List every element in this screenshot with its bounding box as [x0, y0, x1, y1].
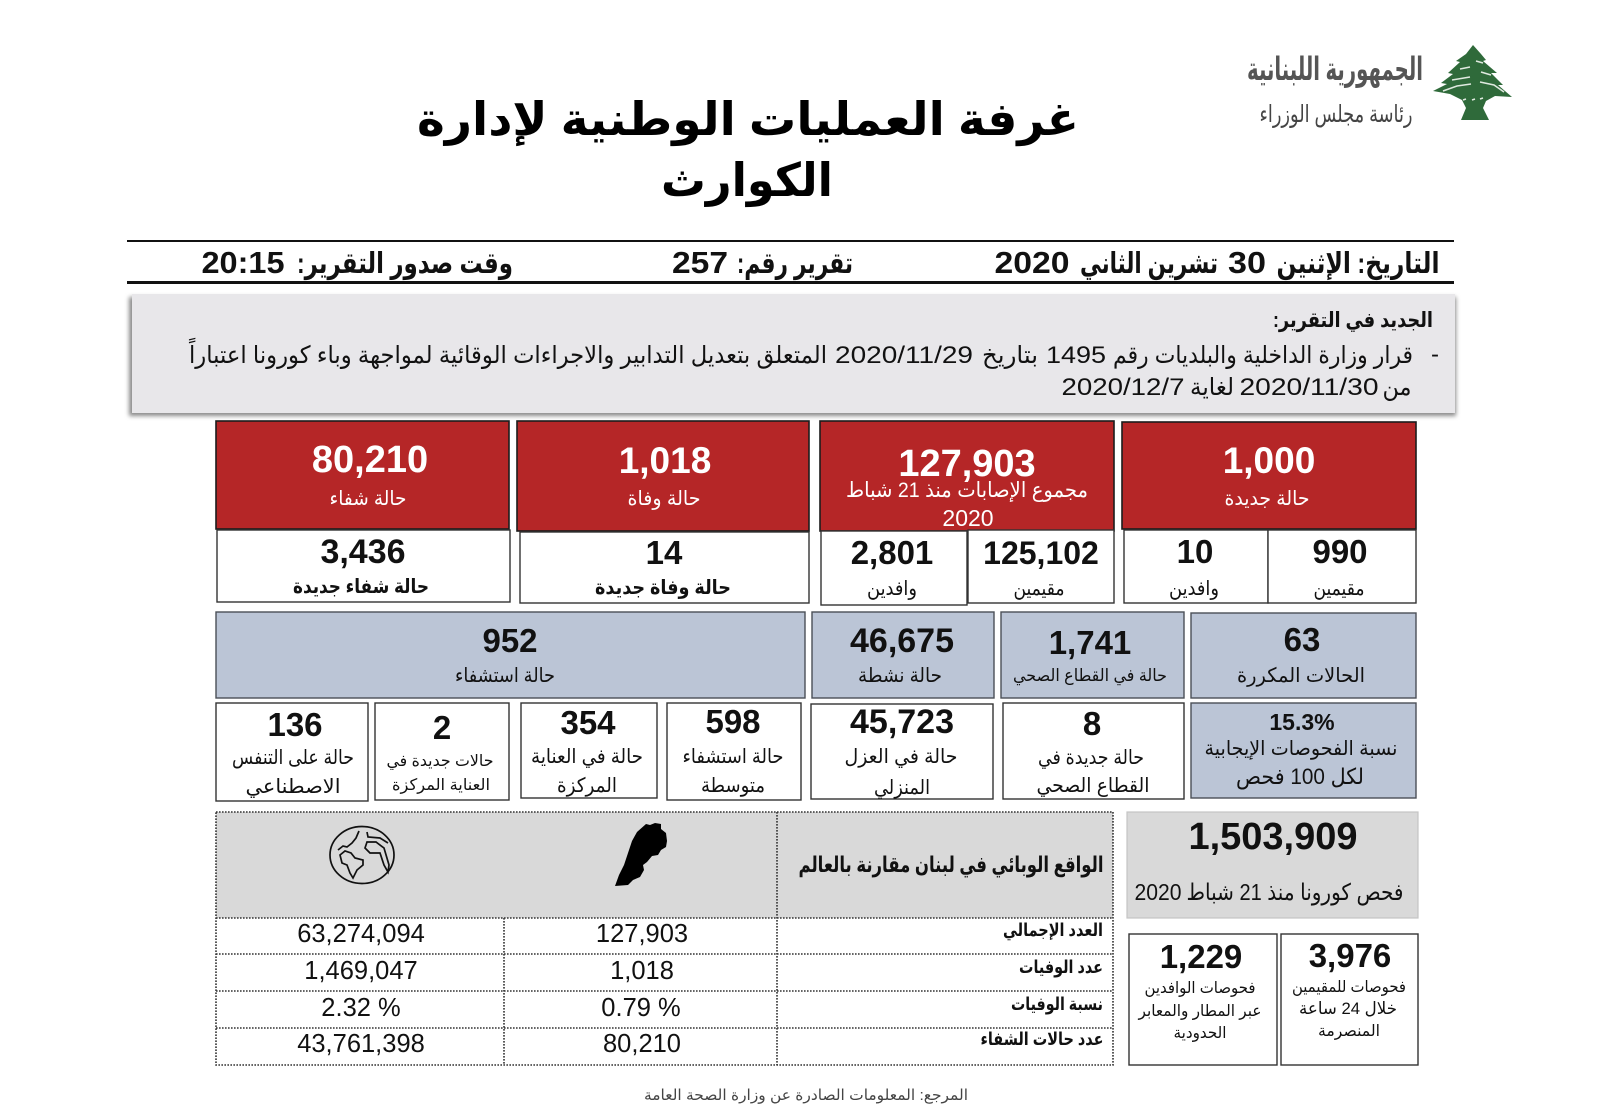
report time: 20:15 — [202, 245, 284, 280]
logo text: republic: الجمهورية اللبنانية — [1247, 51, 1423, 88]
row: total: 63,274,094 — [297, 920, 425, 948]
label: حالة شفاء — [330, 488, 406, 510]
row: deaths: 1,018 — [610, 957, 674, 985]
value: 1,229 — [1160, 938, 1242, 975]
row: total: العدد الإجمالي — [1003, 920, 1103, 941]
label line 2: القطاع الصحي — [1036, 775, 1150, 798]
card: total cases arrivals — [821, 531, 967, 605]
report date: 30 — [1228, 245, 1266, 280]
row: recoveries: 43,761,398 — [297, 1030, 425, 1058]
label line 2: عبر المطار والمعابر — [1138, 1003, 1262, 1021]
card: new recoveries — [217, 530, 510, 602]
report number: تقرير رقم: — [737, 248, 853, 280]
panel body line 1: بتاريخ — [982, 342, 1038, 369]
value: 2,801 — [851, 534, 933, 571]
label line 1: حالة جديدة في — [1038, 747, 1144, 770]
value: 1,741 — [1049, 624, 1131, 661]
report info bar — [127, 240, 1454, 284]
label line 1: مجموع الإصابات منذ 21 شباط — [846, 479, 1088, 502]
panel body line 2: من — [1382, 374, 1412, 401]
label: مقيمين — [1314, 578, 1364, 600]
label: حالة وفاة — [628, 488, 700, 510]
report number — [672, 245, 853, 280]
label line 3: الحدودية — [1174, 1025, 1226, 1043]
label line 1: فحوصات الوافدين — [1144, 980, 1256, 998]
row: death rate — [321, 994, 1103, 1022]
report date: التاريخ: الإثنين — [1276, 248, 1440, 280]
label line 2: 2020 — [942, 505, 994, 531]
label line 1: حالة في العناية — [531, 746, 643, 769]
card: resident tests — [1281, 934, 1418, 1065]
card: new cases residents — [1268, 530, 1416, 603]
report time — [202, 245, 513, 280]
icon: Lebanon map — [615, 823, 667, 886]
icon: globe — [330, 826, 394, 884]
panel body line 1: 2020/11/29 — [835, 342, 973, 369]
label line 2: المنزلي — [874, 777, 930, 800]
value: 952 — [482, 622, 538, 659]
panel: what's new in the report — [129, 294, 1456, 416]
row: total: 127,903 — [596, 920, 688, 948]
value: 10 — [1177, 533, 1213, 570]
label: حالة وفاة جديدة — [595, 577, 731, 599]
panel body line 2 — [1062, 374, 1412, 401]
panel body line 1 — [188, 338, 1413, 369]
label: حالة جديدة — [1224, 488, 1310, 510]
title: الكوارث — [661, 154, 833, 207]
card: moderate hospitalisation — [667, 703, 801, 800]
value: 1,000 — [1223, 440, 1315, 481]
label line 2: العناية المركزة — [392, 777, 490, 795]
row: deaths — [304, 957, 1103, 985]
label line 1: حالة على التنفس — [232, 747, 354, 769]
row: deaths: عدد الوفيات — [1019, 957, 1103, 978]
value: 1,018 — [619, 440, 711, 481]
value: 15.3% — [1269, 709, 1335, 735]
label line 2: لكل 100 فحص — [1236, 764, 1364, 790]
report date: 2020 — [994, 245, 1070, 280]
row: recoveries: عدد حالات الشفاء — [980, 1029, 1104, 1049]
label: وافدين — [867, 578, 917, 600]
label: 2020 — [1134, 879, 1182, 905]
label: حالة استشفاء — [455, 665, 555, 687]
card: arrival tests — [1129, 934, 1277, 1065]
row: death rate: 2.32 % — [321, 994, 401, 1022]
table heading: الواقع الوبائي في لبنان مقارنة بالعالم — [798, 852, 1104, 878]
report number: 257 — [672, 245, 728, 280]
title: غرفة العمليات الوطنية لإدارة — [417, 93, 1079, 146]
panel body line 1: المتعلق بتعديل التدابير والاجراءات الوقائية لمواجهة وباء كورونا اعتباراً — [188, 338, 827, 369]
card: total cases — [820, 421, 1114, 531]
panel body line 2: 2020/12/7 — [1062, 374, 1184, 401]
row: death rate: 0.79 % — [601, 994, 681, 1022]
value: 46,675 — [850, 622, 954, 660]
value: 127,903 — [898, 443, 1036, 485]
value: 598 — [705, 703, 761, 740]
label: الحالات المكررة — [1237, 665, 1365, 687]
row: deaths: 1,469,047 — [304, 957, 418, 985]
card: home isolation — [811, 703, 993, 800]
label line 1: نسبة الفحوصات الإيجابية — [1204, 738, 1398, 760]
source note: المرجع: المعلومات الصادرة عن وزارة الصحة العامة — [644, 1087, 968, 1104]
label line 1: حالة في العزل — [844, 746, 958, 769]
card: health sector cases — [1001, 612, 1184, 698]
value: 3,436 — [320, 533, 406, 571]
label line 3: المنصرمة — [1318, 1023, 1380, 1041]
card: new cases arrivals — [1124, 530, 1268, 603]
value: 63 — [1284, 621, 1320, 658]
value: 3,976 — [1309, 937, 1391, 974]
label: فحص كورونا منذ 21 شباط — [1186, 879, 1404, 906]
row: recoveries — [297, 1029, 1104, 1058]
card: hospitalised — [216, 612, 805, 698]
card: new ICU — [375, 703, 509, 800]
value: 990 — [1312, 533, 1368, 570]
logo text: presidency: رئاسة مجلس الوزراء — [1260, 101, 1412, 128]
label: حالة في القطاع الصحي — [1013, 666, 1167, 686]
value: 136 — [267, 706, 323, 743]
card: new deaths — [520, 532, 809, 603]
panel body line 2: 2020/11/30 — [1240, 374, 1378, 401]
value: 8 — [1083, 705, 1101, 742]
label: حالة شفاء جديدة — [293, 576, 429, 598]
value: 80,210 — [312, 439, 428, 481]
report date — [994, 245, 1440, 280]
card: ventilated — [216, 703, 368, 801]
panel body line 1: 1495 — [1046, 342, 1106, 369]
label line 2: المركزة — [557, 775, 617, 797]
label line 2: الاصطناعي — [246, 776, 340, 799]
row: total — [297, 920, 1103, 948]
row: recoveries: 80,210 — [603, 1030, 681, 1058]
table: Lebanon compared to the world — [216, 812, 1113, 1065]
label line 1: حالات جديدة في — [386, 753, 494, 771]
bullet dash: - — [1431, 341, 1439, 368]
label: حالة نشطة — [858, 665, 942, 687]
value: 354 — [560, 704, 616, 741]
row: death rate: نسبة الوفيات — [1011, 994, 1103, 1015]
label line 1: فحوصات للمقيمين — [1292, 979, 1406, 997]
value: 125,102 — [983, 535, 1099, 571]
report time: وقت صدور التقرير: — [297, 248, 513, 280]
label line 2: خلال 24 ساعة — [1299, 999, 1397, 1018]
panel body line 1: قرار وزارة الداخلية والبلديات رقم — [1113, 342, 1413, 369]
card: duplicate cases — [1191, 613, 1416, 698]
card: positivity rate — [1191, 703, 1416, 798]
panel body line 2: لغاية — [1190, 374, 1234, 401]
value: 45,723 — [850, 703, 954, 741]
label: وافدين — [1169, 578, 1219, 600]
report date: تشرين الثاني — [1080, 248, 1218, 280]
card: total tests — [1127, 812, 1418, 918]
card: recoveries — [216, 421, 509, 529]
value: 1,503,909 — [1188, 816, 1358, 858]
panel heading: الجديد في التقرير: — [1273, 309, 1433, 332]
value: 2 — [433, 709, 451, 746]
card: total cases residents — [968, 530, 1114, 603]
card: new health sector — [1003, 703, 1184, 799]
card: deaths — [517, 421, 809, 531]
card: active cases — [812, 612, 994, 698]
logo: Lebanese Republic emblem — [1247, 45, 1512, 128]
card: ICU — [521, 703, 657, 798]
label line 1: حالة استشفاء — [682, 746, 784, 768]
icon: cedar tree — [1433, 45, 1512, 120]
title — [417, 93, 1079, 207]
label line 2: متوسطة — [701, 775, 765, 797]
label: مقيمين — [1014, 578, 1064, 600]
card: new cases — [1122, 422, 1416, 529]
value: 14 — [646, 534, 683, 571]
